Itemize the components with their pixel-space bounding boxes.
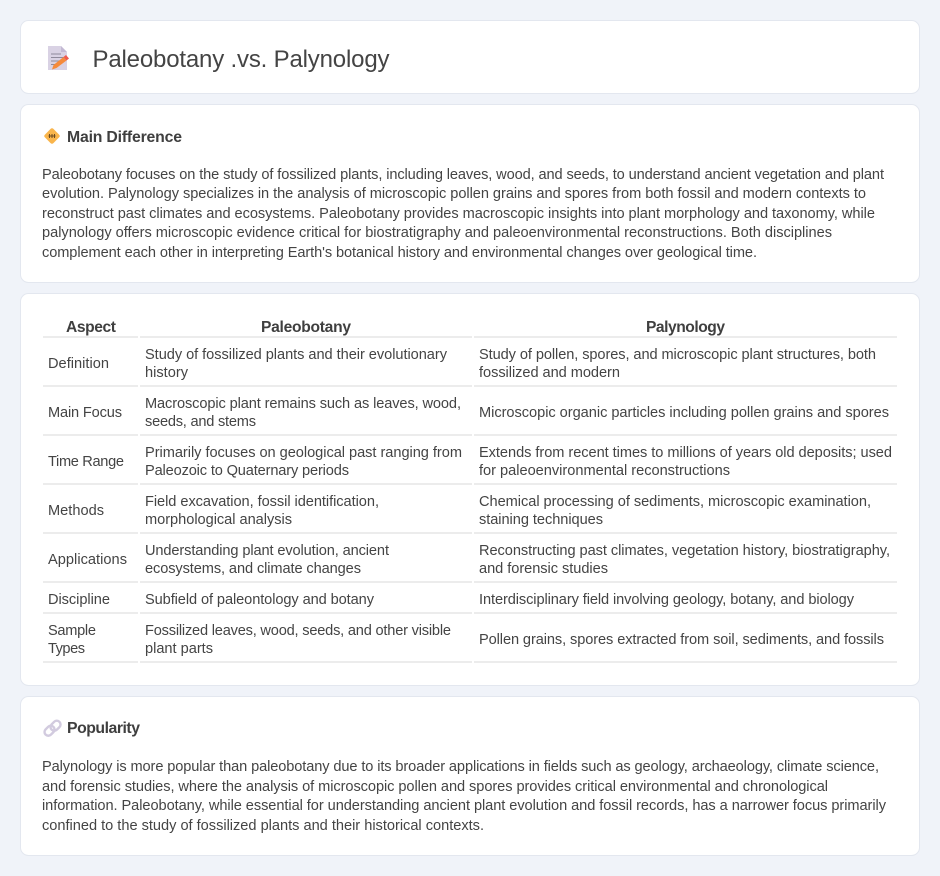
heading: popularity: Popularity bbox=[67, 720, 140, 737]
text block: popularity paragraph: Palynology is more popular than paleobotany due to its broader applications in fields such as geology, archaeology, climate science, bbox=[42, 759, 879, 775]
row: time range: Paleozoic to Quaternary periods bbox=[145, 463, 349, 479]
row: discipline: Subfield of paleontology and botany bbox=[145, 592, 375, 608]
row: definition: Definition bbox=[48, 356, 109, 372]
row: main focus: seeds, and stems bbox=[145, 414, 256, 430]
table header row: Paleobotany bbox=[261, 319, 351, 336]
row: definition: fossilized and modern bbox=[479, 365, 620, 381]
table header row bbox=[66, 319, 725, 336]
row: main focus: Macroscopic plant remains such as leaves, wood, bbox=[145, 396, 461, 412]
row: methods bbox=[48, 494, 871, 528]
row: methods: morphological analysis bbox=[145, 512, 292, 528]
text block: main difference paragraph: palynology offers microscopic evidence critical for biostratigraphy and paleoenvironmental reconstructions. Both disciplines bbox=[42, 225, 832, 241]
text block: main difference paragraph: Paleobotany focuses on the study of fossilized plants, including leaves, wood, and seeds, to understand ancient vegetation and plant bbox=[42, 167, 884, 183]
row: discipline: Interdisciplinary field involving geology, botany, and biology bbox=[479, 592, 855, 608]
text block: main difference paragraph: evolution. Palynology specializes in the analysis of microscopic pollen grains and spores from both fossil and modern contexts to bbox=[42, 186, 866, 202]
panel: main difference bbox=[20, 104, 920, 282]
row: discipline: Discipline bbox=[48, 592, 110, 608]
row: main focus bbox=[48, 396, 889, 430]
icon: document with pencil bbox=[48, 46, 69, 70]
panel: title header bbox=[20, 20, 920, 94]
text block: popularity paragraph: confined to the study of fossilized plants and their historical contexts. bbox=[42, 818, 484, 834]
row: methods: staining techniques bbox=[479, 512, 603, 528]
row: time range: for paleoenvironmental reconstructions bbox=[479, 463, 730, 479]
row: time range: Extends from recent times to millions of years old deposits; used bbox=[479, 445, 892, 461]
row: applications: Applications bbox=[48, 552, 127, 568]
text block: popularity paragraph: and forensic studies, where the analysis of microscopic pollen and spores provides critical environmental and chronological bbox=[42, 779, 828, 795]
title: Paleobotany .vs. Palynology bbox=[92, 46, 390, 73]
text block: popularity paragraph: information. Paleobotany, while essential for understanding ancient plant evolution and fossil records, has a narrower focus primarily bbox=[42, 798, 887, 814]
row: applications: and forensic studies bbox=[479, 561, 608, 577]
text block: main difference paragraph bbox=[42, 167, 884, 261]
row: applications: Understanding plant evolution, ancient bbox=[145, 543, 389, 559]
row: sample types: Types bbox=[48, 641, 85, 657]
row: sample types bbox=[48, 623, 884, 657]
text block: popularity paragraph bbox=[42, 759, 887, 834]
row: methods: Methods bbox=[48, 503, 104, 519]
table header row: Palynology bbox=[646, 319, 725, 336]
icon: chain link bbox=[43, 719, 62, 737]
panel: comparison table bbox=[20, 294, 920, 686]
icon: warning diamond bbox=[44, 128, 60, 144]
row: time range: Primarily focuses on geological past ranging from bbox=[145, 445, 462, 461]
text block: main difference paragraph: complement each other in interpreting Earth's botanical history and environmental changes over geological time. bbox=[42, 245, 757, 261]
row: time range bbox=[48, 445, 892, 479]
row: sample types: plant parts bbox=[145, 641, 213, 657]
row: applications bbox=[48, 543, 890, 577]
row: sample types: Sample bbox=[48, 623, 96, 639]
row: methods: Field excavation, fossil identification, bbox=[145, 494, 379, 510]
row: applications: ecosystems, and climate changes bbox=[145, 561, 361, 577]
panel: popularity bbox=[20, 696, 920, 856]
row: definition bbox=[48, 347, 876, 381]
row: discipline bbox=[48, 592, 855, 608]
row: sample types: Fossilized leaves, wood, seeds, and other visible bbox=[145, 623, 451, 639]
text block: main difference paragraph: reconstruct past climates and ecosystems. Paleobotany provides macroscopic insights into plant morphology and taxonomy, while bbox=[42, 206, 875, 222]
row: main focus: Microscopic organic particles including pollen grains and spores bbox=[479, 405, 889, 421]
row: sample types: Pollen grains, spores extracted from soil, sediments, and fossils bbox=[479, 632, 884, 648]
table header row: Aspect bbox=[66, 319, 116, 336]
row: definition: Study of fossilized plants and their evolutionary bbox=[145, 347, 448, 363]
row: time range: Time Range bbox=[48, 454, 124, 470]
row: definition: history bbox=[145, 365, 189, 381]
row: applications: Reconstructing past climates, vegetation history, biostratigraphy, bbox=[479, 543, 890, 559]
heading: main difference: Main Difference bbox=[67, 129, 182, 146]
row: methods: Chemical processing of sediments, microscopic examination, bbox=[479, 494, 871, 510]
row: definition: Study of pollen, spores, and microscopic plant structures, both bbox=[479, 347, 876, 363]
row: main focus: Main Focus bbox=[48, 405, 122, 421]
